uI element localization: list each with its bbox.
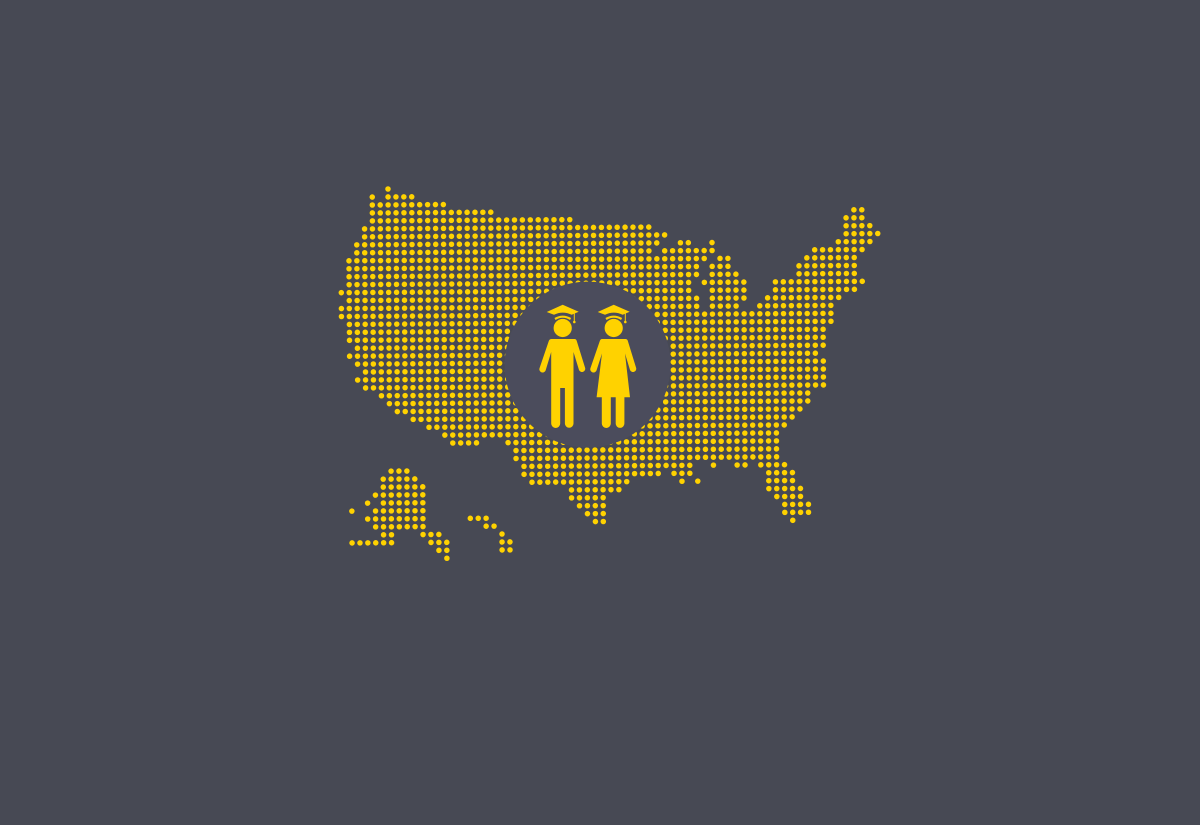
head bbox=[554, 319, 572, 337]
dress and limbs bbox=[590, 339, 636, 428]
graduation cap bbox=[547, 305, 579, 323]
dot map: Hawaii bbox=[470, 518, 511, 550]
dot map: contiguous United States bbox=[341, 186, 880, 523]
icon: male graduate bbox=[539, 305, 585, 428]
head bbox=[605, 319, 623, 337]
graduation cap bbox=[598, 305, 630, 323]
dot map: Alaska bbox=[352, 471, 448, 559]
icon: female graduate bbox=[590, 305, 636, 428]
body bbox=[539, 339, 585, 428]
central circle badge bbox=[505, 282, 671, 448]
